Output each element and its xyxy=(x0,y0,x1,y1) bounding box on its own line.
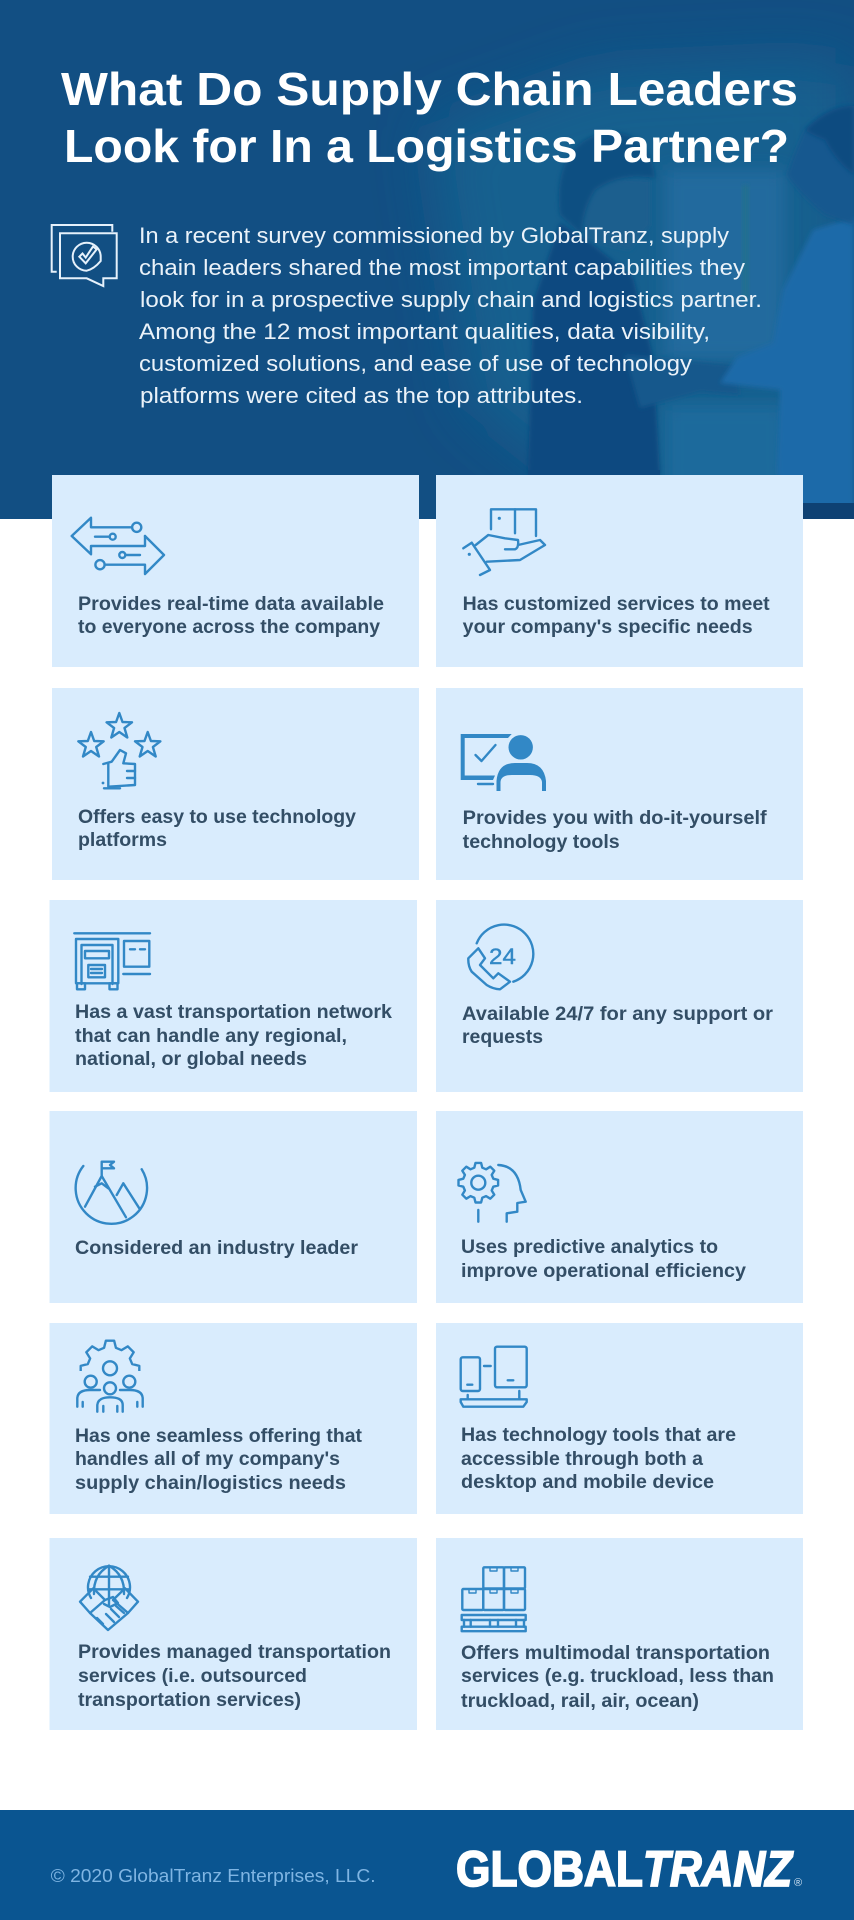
panel: transportation network xyxy=(50,900,417,1092)
intro text: customized solutions, and ease of use of technology xyxy=(139,351,692,376)
text: multimodal transportation: services (e.g. truckload, less than xyxy=(461,1666,774,1687)
text: real-time data: to everyone across the company xyxy=(78,617,380,638)
icon: phone 24: 24 xyxy=(489,944,516,969)
icon: mountain with flag xyxy=(76,1162,147,1224)
text: predictive analytics: Uses predictive analytics to xyxy=(461,1237,718,1258)
logo: GlobalTranz: GLOBAL xyxy=(456,1841,643,1897)
intro text: platforms were cited as the top attributes. xyxy=(140,383,583,408)
intro text: Among the 12 most important qualities, data visibility, xyxy=(139,319,710,344)
icon: globe and handshake xyxy=(80,1566,138,1630)
text: managed transportation: services (i.e. outsourced xyxy=(78,1666,307,1687)
text: predictive analytics: improve operational efficiency xyxy=(461,1261,746,1282)
text: desktop and mobile: Has technology tools that are xyxy=(461,1425,736,1446)
text: multimodal transportation xyxy=(461,1643,774,1712)
text: predictive analytics xyxy=(461,1237,746,1282)
title xyxy=(61,63,798,172)
text: customized services: Has customized services to meet xyxy=(463,594,770,615)
text: seamless offering: Has one seamless offering that xyxy=(75,1426,363,1447)
panel: predictive analytics xyxy=(436,1111,803,1303)
text: multimodal transportation: truckload, rail, air, ocean) xyxy=(461,1691,699,1712)
title: What Do Supply Chain Leaders xyxy=(61,63,798,115)
text: seamless offering: supply chain/logistics needs xyxy=(75,1473,346,1494)
text: customized services xyxy=(463,594,770,638)
icon: data arrows xyxy=(72,518,164,574)
intro text: In a recent survey commissioned by GlobalTranz, supply xyxy=(139,223,729,248)
logo: GlobalTranz: TRANZ xyxy=(643,1841,794,1897)
text: transportation network: that can handle any regional, xyxy=(75,1026,347,1047)
panel: industry leader xyxy=(50,1111,417,1303)
text: managed transportation: transportation services) xyxy=(78,1690,301,1711)
text: do-it-yourself tools xyxy=(463,808,767,853)
text: do-it-yourself tools: technology tools xyxy=(463,832,620,853)
title: Look for In a Logistics Partner? xyxy=(64,120,789,172)
panel: easy technology xyxy=(52,688,419,880)
panel: customized services xyxy=(436,475,803,667)
icon: gear and head xyxy=(458,1163,526,1222)
panel: desktop and mobile xyxy=(436,1323,803,1514)
text: 24/7 support: Available 24/7 for any support or xyxy=(462,1004,774,1025)
panel: real-time data xyxy=(52,475,419,667)
text: do-it-yourself tools: Provides you with do-it-yourself xyxy=(463,808,767,829)
text: easy technology xyxy=(78,807,356,851)
text: customized services: your company's specific needs xyxy=(463,617,753,638)
logo: GlobalTranz xyxy=(456,1841,802,1897)
text: desktop and mobile xyxy=(461,1425,736,1493)
text: managed transportation xyxy=(78,1642,391,1711)
text: industry leader: Considered an industry leader xyxy=(75,1238,359,1259)
text: transportation network: national, or global needs xyxy=(75,1049,307,1070)
intro text: look for in a prospective supply chain and logistics partner. xyxy=(140,287,762,312)
text: real-time data xyxy=(78,594,384,638)
icon: truck and box xyxy=(74,933,150,989)
icon: monitor and person xyxy=(461,734,546,791)
icon: phone and tablet xyxy=(461,1347,527,1407)
hero banner with photo of handshake xyxy=(0,0,854,519)
text: easy technology: Offers easy to use technology xyxy=(78,807,356,828)
copyright: © 2020 GlobalTranz Enterprises, LLC. xyxy=(51,1866,376,1886)
text: transportation network xyxy=(75,1002,392,1070)
icon: boxes on pallet xyxy=(462,1567,526,1631)
text: desktop and mobile: accessible through both a xyxy=(461,1449,703,1470)
text: desktop and mobile: desktop and mobile device xyxy=(461,1472,714,1493)
text: 24/7 support: requests xyxy=(462,1027,543,1048)
text: real-time data: Provides real-time data available xyxy=(78,594,384,615)
panel: 24/7 support xyxy=(436,900,803,1092)
icon: hand holding box xyxy=(463,509,545,575)
panel: multimodal transportation xyxy=(436,1538,803,1730)
footer band xyxy=(0,1810,854,1920)
text: seamless offering: handles all of my company's xyxy=(75,1449,340,1470)
icon: stars and thumbs up xyxy=(78,713,160,788)
icon: team with gear xyxy=(77,1341,143,1412)
panel: do-it-yourself tools xyxy=(436,688,803,880)
panel: managed transportation xyxy=(50,1538,417,1730)
text: managed transportation: Provides managed transportation xyxy=(78,1642,391,1663)
panel: seamless offering xyxy=(50,1323,417,1514)
intro text xyxy=(139,223,762,408)
text: easy technology: platforms xyxy=(78,830,167,851)
icon: phone 24 xyxy=(468,925,533,989)
icon: speech bubble with check xyxy=(52,225,117,286)
intro text: chain leaders shared the most important capabilities they xyxy=(139,255,745,280)
text: transportation network: Has a vast transportation network xyxy=(75,1002,392,1023)
text: multimodal transportation: Offers multimodal transportation xyxy=(461,1643,770,1664)
logo: GlobalTranz: ® xyxy=(794,1877,802,1889)
text: 24/7 support xyxy=(462,1004,774,1048)
text: seamless offering xyxy=(75,1426,363,1494)
